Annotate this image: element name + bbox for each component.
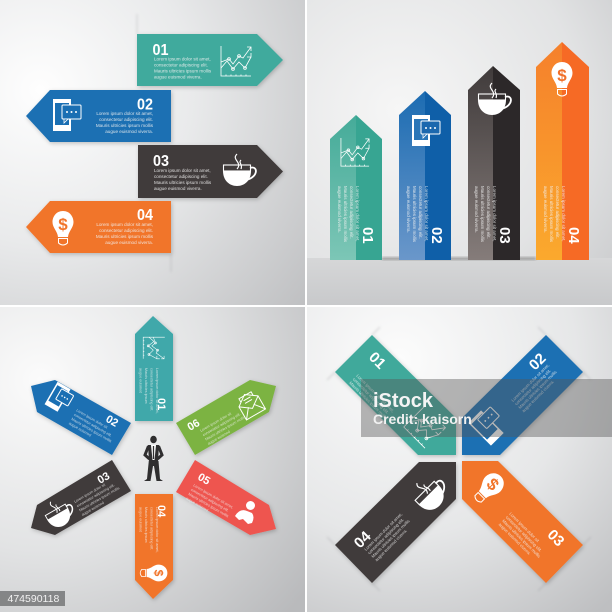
- petal 05 red: Mauris ultricies ipsum mollis: [188, 492, 229, 519]
- petal 03 dark: consectetur adipiscing elit.: [76, 483, 115, 508]
- column 04 orange: Mauris ultricies ipsum mollis: [549, 186, 554, 243]
- column 02 blue: [399, 91, 451, 260]
- ribbon 01 teal: Mauris ultricies ipsum mollis: [348, 380, 389, 421]
- ribbon 03 orange: Mauris ultricies ipsum mollis: [501, 518, 542, 559]
- arrow 04 orange: [26, 201, 171, 253]
- arrow 03 dark: 03: [153, 153, 169, 170]
- ribbon 04 dark: [335, 462, 456, 583]
- column 03 dark: consectetur adipiscing elit.: [486, 186, 491, 239]
- petal 04 orange: 04: [155, 505, 167, 518]
- petal 03 dark: Lorem ipsum dolor sit: [74, 483, 106, 504]
- petal 04 orange: Mauris ultricies ipsum: [144, 507, 148, 542]
- ribbon 03 orange: augue euismod viverra.: [498, 522, 532, 556]
- petal 06 green: Mauris ultricies ipsum mollis: [204, 415, 246, 442]
- ribbon 03 orange: consectetur adipiscing elit.: [505, 515, 543, 553]
- petal 03 dark: augue euismod: [81, 501, 105, 517]
- petal 04 orange: consectetur adipiscing elit.: [150, 507, 154, 550]
- arrow 04 orange: augue euismod viverra.: [105, 240, 153, 245]
- arrow 04 orange: consectetur adipiscing elit.: [99, 228, 153, 233]
- petal 03 dark: 03: [96, 470, 112, 487]
- arrow 03 dark: Mauris ultricies ipsum mollis: [154, 180, 212, 185]
- petal 02 blue: consectetur adipiscing elit.: [73, 413, 112, 438]
- ribbon 04 dark: consectetur adipiscing elit.: [367, 517, 405, 555]
- column 04 orange: 04: [565, 227, 582, 244]
- column 03 dark: Lorem ipsum dolor sit amet,: [492, 186, 497, 242]
- column 01 teal: augue euismod viverra.: [337, 186, 342, 233]
- petal 03 dark: [31, 460, 131, 535]
- watermark band: iStock: [373, 390, 434, 412]
- petal 01 teal: Mauris ultricies ipsum: [144, 368, 148, 403]
- petal 03 dark: Mauris ultricies ipsum mollis: [78, 486, 120, 513]
- arrow 04 orange: 04: [137, 207, 153, 224]
- ribbon 02 blue: Mauris ultricies ipsum mollis: [517, 369, 558, 410]
- petal 04 orange: Lorem ipsum dolor sit amet,: [155, 507, 159, 552]
- petal 02 blue: Mauris ultricies ipsum mollis: [70, 417, 112, 444]
- arrow 01 teal: consectetur adipiscing elit.: [154, 62, 208, 68]
- column 03 dark: [468, 66, 520, 260]
- petal 02 blue: augue euismod: [68, 421, 92, 437]
- petal 01 teal: 01: [155, 398, 167, 410]
- ribbon 04 dark: Lorem ipsum dolor sit amet,: [363, 512, 403, 552]
- arrow 01 teal: 01: [152, 42, 169, 59]
- ribbon 04 dark: augue euismod viverra.: [374, 528, 408, 562]
- panel: rising arrow columns: [330, 42, 589, 260]
- arrow 01 teal: Lorem ipsum dolor sit amet,: [154, 56, 211, 62]
- image id tag: [0, 591, 65, 606]
- column 04 orange: consectetur adipiscing elit.: [555, 186, 560, 239]
- watermark band: [361, 379, 612, 437]
- ribbon 01 teal: Lorem ipsum dolor sit amet,: [355, 373, 395, 413]
- ribbon 01 teal: 01: [365, 349, 389, 373]
- arrow 03 dark: augue euismod viverra.: [154, 186, 202, 191]
- ribbon 03 orange: [462, 461, 583, 583]
- icon: user: [235, 501, 255, 524]
- petal 01 teal: Lorem ipsum dolor sit amet,: [155, 368, 159, 414]
- panel: horizontal arrows: [26, 14, 283, 272]
- ribbon 03 orange: Lorem ipsum dolor sit: [508, 511, 541, 544]
- ribbon 03 orange: 03: [544, 526, 567, 550]
- column 02 blue: Lorem ipsum dolor sit amet,: [424, 186, 429, 242]
- petal 05 red: 05: [196, 471, 212, 488]
- column 02 blue: augue euismod viverra.: [406, 186, 411, 233]
- column 04 orange: Lorem ipsum dolor sit amet,: [561, 186, 566, 242]
- column 01 teal: 01: [359, 227, 376, 244]
- arrow 01 teal: [137, 34, 283, 86]
- petal 02 blue: [31, 380, 131, 455]
- arrow 04 orange: Mauris ultricies ipsum mollis: [96, 234, 154, 239]
- ribbon 02 blue: 02: [526, 350, 550, 374]
- column 02 blue: 02: [428, 227, 445, 244]
- arrow 02 blue: Lorem ipsum dolor sit amet,: [96, 111, 153, 116]
- column 03 dark: augue euismod viverra.: [474, 186, 479, 233]
- watermark band: Credit: kaisorn: [373, 411, 472, 427]
- petal 05 red: Lorem ipsum dolor sit amet,: [192, 483, 234, 510]
- arrow 01 teal: Mauris ultricies ipsum mollis: [154, 68, 212, 74]
- ribbon 02 blue: consectetur adipiscing elit.: [514, 368, 552, 406]
- petal 04 orange: $: [152, 570, 166, 577]
- arrow 03 dark: consectetur adipiscing elit.: [154, 174, 208, 179]
- ribbon 02 blue: Lorem ipsum dolor sit amet,: [510, 363, 550, 403]
- petal 06 green: augue euismod: [207, 430, 231, 446]
- petal 02 blue: 02: [104, 413, 120, 430]
- petal 04 orange: augue euismod: [138, 507, 142, 532]
- arrow 02 blue: Mauris ultricies ipsum mollis: [96, 123, 154, 128]
- petal 05 red: consectetur adipiscing elit.: [190, 488, 229, 513]
- petal 05 red: augue euismod: [185, 496, 209, 512]
- icon: phone: [53, 99, 81, 131]
- petal 01 teal: [135, 316, 173, 421]
- ribbon 01 teal: consectetur adipiscing elit.: [352, 377, 390, 415]
- petal 06 green: consectetur adipiscing elit.: [202, 412, 241, 437]
- ribbon 02 blue: [462, 335, 583, 455]
- column 01 teal: [330, 115, 382, 260]
- column 03 dark: 03: [496, 227, 513, 244]
- column 04 orange: $: [557, 66, 567, 85]
- arrow 03 dark: Lorem ipsum dolor sit amet,: [154, 168, 211, 173]
- petal 04 orange: [135, 494, 173, 599]
- ribbon 01 teal: [335, 335, 456, 455]
- column 01 teal: Mauris ultricies ipsum mollis: [343, 186, 348, 243]
- arrow 03 dark: [138, 145, 283, 198]
- column 01 teal: Lorem ipsum dolor sit amet,: [355, 186, 360, 242]
- ribbon 04 dark: 04: [351, 528, 375, 552]
- arrow 01 teal: augue euismod viverra.: [154, 74, 202, 80]
- icon: businessman: [144, 436, 163, 481]
- image id tag: 474590118: [8, 593, 59, 605]
- column 01 teal: consectetur adipiscing elit.: [349, 186, 354, 239]
- petal 06 green: Lorem ipsum dolor sit: [200, 412, 232, 433]
- icon: envelope: [235, 389, 266, 420]
- petal 01 teal: augue euismod: [138, 368, 142, 393]
- ribbon 04 dark: Mauris ultricies ipsum mollis: [370, 518, 411, 559]
- panel: X diagram: [327, 327, 591, 591]
- column 04 orange: [536, 42, 589, 260]
- ribbon 03 orange: $: [483, 474, 503, 495]
- petal 05 red: [176, 460, 276, 535]
- petal 06 green: [176, 380, 276, 455]
- petal 06 green: 06: [186, 417, 202, 434]
- ribbon 02 blue: augue euismod viverra.: [521, 379, 555, 413]
- arrow 04 orange: Lorem ipsum dolor sit amet,: [96, 222, 153, 227]
- petal 01 teal: consectetur adipiscing elit.: [150, 368, 154, 411]
- arrow 02 blue: augue euismod viverra.: [105, 129, 153, 134]
- column 03 dark: Mauris ultricies ipsum mollis: [480, 186, 485, 243]
- column 04 orange: augue euismod viverra.: [543, 186, 548, 233]
- petal 02 blue: Lorem ipsum dolor sit: [76, 408, 108, 429]
- arrow 02 blue: [26, 90, 171, 142]
- column 02 blue: Mauris ultricies ipsum mollis: [412, 186, 417, 243]
- panel: six-petal diagram: [31, 316, 276, 599]
- arrow 02 blue: consectetur adipiscing elit.: [99, 117, 153, 122]
- arrow 02 blue: 02: [137, 96, 153, 114]
- arrow 04 orange: $: [58, 215, 68, 234]
- column 02 blue: consectetur adipiscing elit.: [418, 186, 423, 239]
